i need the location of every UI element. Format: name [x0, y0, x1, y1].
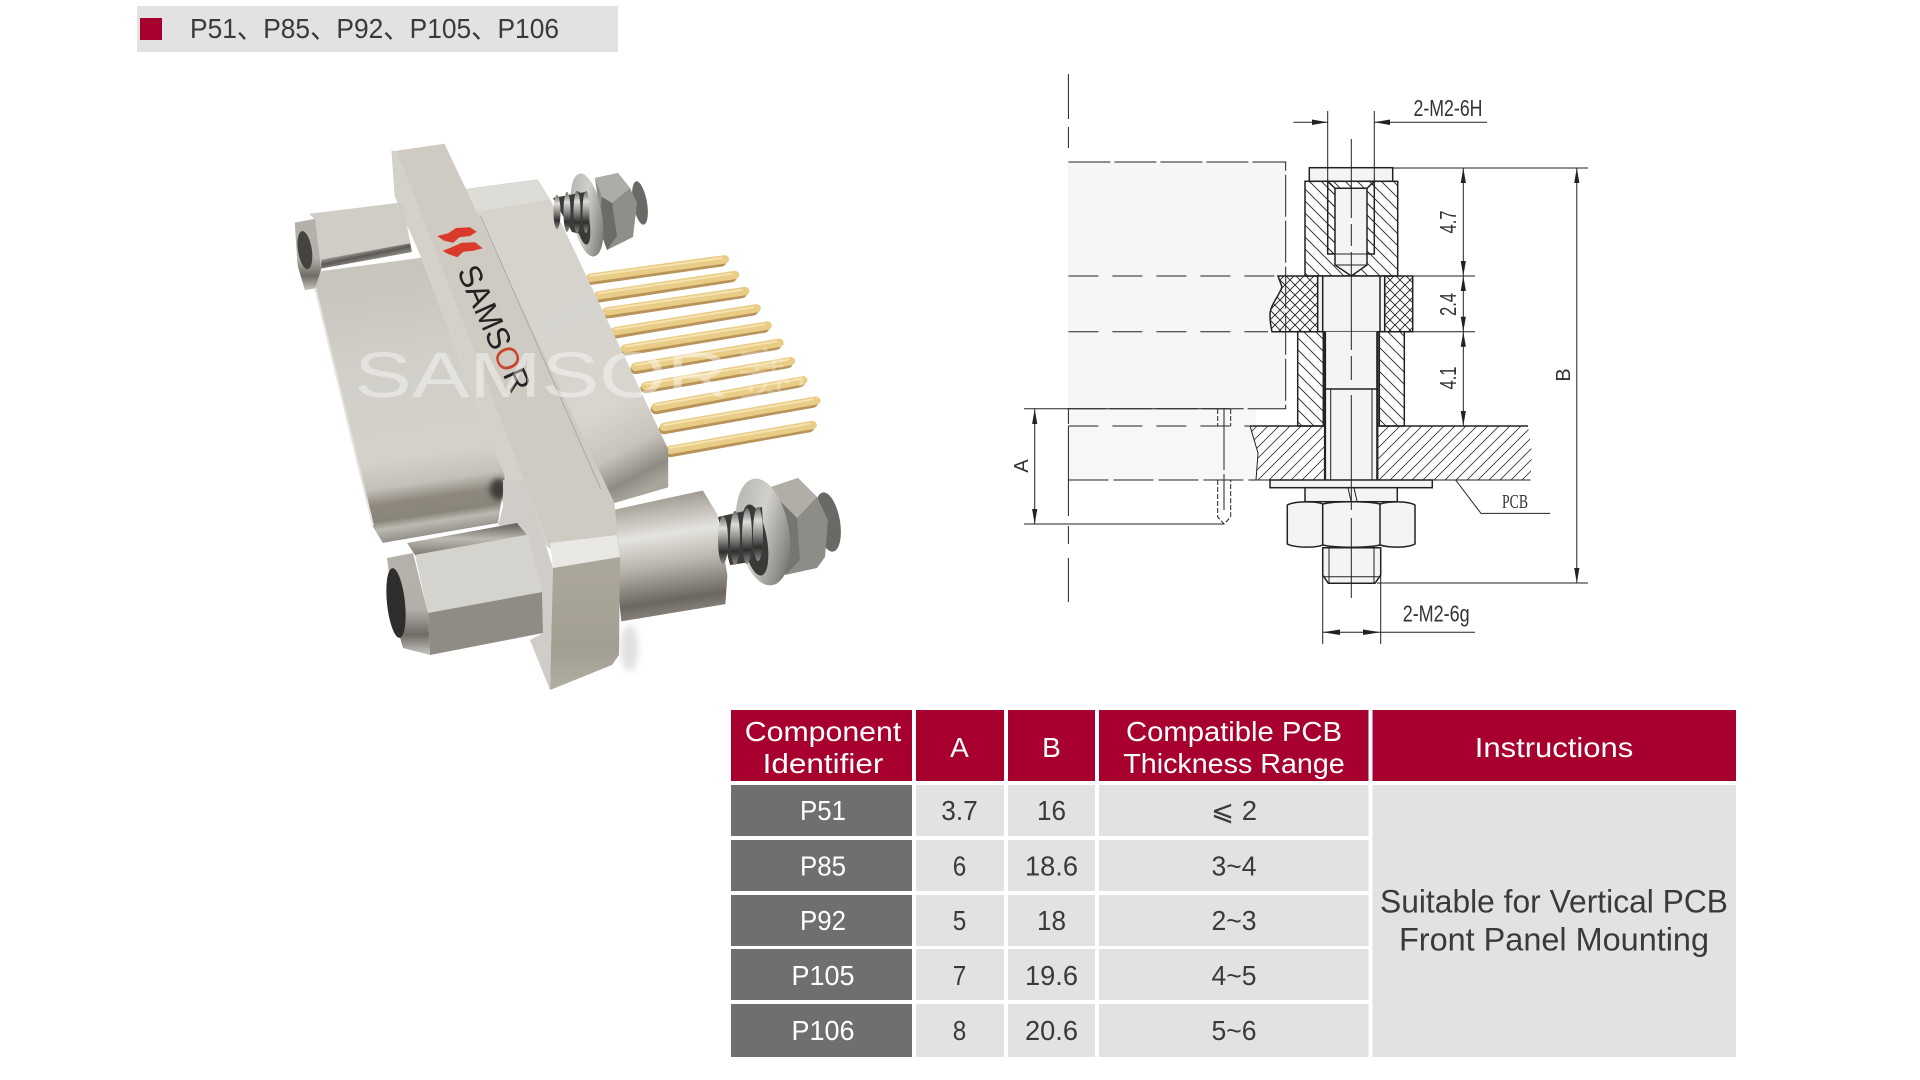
- flange front face: [397, 144, 620, 556]
- dimension 2-M2-6g: 2-M2-6g: [1403, 601, 1470, 627]
- row P92: 2~3: [1212, 905, 1256, 936]
- row P92: 5: [953, 905, 966, 936]
- bottom right standoff cylinder: [611, 490, 727, 621]
- PCB leader: PCB: [1502, 491, 1528, 513]
- dimension B: B: [1553, 368, 1575, 382]
- row P85: 6: [953, 850, 966, 882]
- table header: Component: [745, 716, 901, 747]
- row P85: 18.6: [1025, 850, 1078, 882]
- row P85: [731, 840, 1368, 891]
- model list bar: [137, 6, 618, 52]
- label 4.7: 4.7: [1435, 210, 1461, 234]
- row P106: P106: [792, 1015, 854, 1046]
- dimension 2-M2-6g: [1323, 547, 1475, 644]
- standoff section: [1305, 168, 1398, 276]
- faint watermark: SAMSOR: [354, 339, 729, 411]
- row P106: [731, 1004, 1368, 1057]
- table header: Thickness Range: [1123, 748, 1345, 779]
- instructions cell: [1372, 785, 1736, 1057]
- table header: B: [1042, 732, 1061, 763]
- table header: A: [950, 732, 969, 763]
- connector product render: [295, 144, 849, 690]
- row P51: P51: [800, 795, 846, 826]
- label 2.4: 2.4: [1435, 293, 1461, 316]
- row P92: P92: [800, 905, 846, 936]
- row P85: 3~4: [1212, 850, 1256, 882]
- brand name on flange: SAMSOR: [450, 260, 538, 397]
- connector pin: [1218, 409, 1231, 524]
- PCB leader: [1456, 480, 1550, 513]
- label 4.1: 4.1: [1435, 366, 1461, 390]
- row P105: 4~5: [1212, 960, 1256, 991]
- red square marker: [140, 18, 162, 40]
- row P106: 20.6: [1025, 1015, 1078, 1046]
- row P51: [731, 785, 1368, 836]
- bottom left standoff: [383, 523, 543, 655]
- row P51: 16: [1037, 795, 1066, 826]
- instructions cell: Suitable for Vertical PCB: [1380, 884, 1728, 920]
- table header: Instructions: [1475, 732, 1633, 763]
- rear shell: [464, 179, 668, 505]
- faint watermark: [354, 339, 849, 411]
- row P105: P105: [792, 960, 854, 991]
- dimension 2-M2-6H: [1294, 95, 1487, 181]
- panel section: [1270, 276, 1413, 332]
- axis of screw: [1350, 139, 1352, 598]
- technical drawing: [1011, 74, 1588, 644]
- dimension A: A: [1011, 459, 1033, 473]
- soft shadow: [620, 625, 638, 671]
- row P92: [731, 895, 1368, 946]
- washer, nut and bolt: [1270, 480, 1432, 583]
- top right bolt, washer and nut: [553, 171, 651, 259]
- row P51: ⩽ 2: [1211, 795, 1257, 826]
- top left standoff: [295, 202, 412, 290]
- row P85: P85: [800, 850, 846, 882]
- instructions cell: Front Panel Mounting: [1399, 922, 1709, 958]
- flange highlight band: [550, 535, 620, 568]
- row P105: 19.6: [1025, 960, 1078, 991]
- row P92: 18: [1037, 905, 1066, 936]
- dimension lines 4.7, 2.4, 4.1: [1393, 168, 1588, 426]
- table header: Compatible PCB: [1126, 716, 1342, 747]
- centre line of connector: [1067, 74, 1069, 602]
- flange lower wall: [498, 480, 553, 690]
- row P51: 3.7: [941, 795, 978, 826]
- PCB section: [1250, 426, 1532, 480]
- front shell: [313, 258, 505, 543]
- gold pins: [591, 258, 816, 452]
- flange end face: [550, 557, 620, 690]
- light grey outline of connector body: [1068, 162, 1345, 480]
- faint watermark: 赛硕: [737, 344, 849, 407]
- table header: [731, 710, 1736, 781]
- row P105: 7: [953, 960, 966, 991]
- spacer section: [1298, 332, 1404, 480]
- row P106: 8: [953, 1015, 966, 1046]
- specification table: [731, 710, 1736, 1057]
- model list text: P51、P85、P92、P105、P106: [190, 13, 559, 44]
- dimension 2-M2-6H: 2-M2-6H: [1414, 95, 1482, 121]
- table header: Identifier: [763, 748, 883, 779]
- dimension B: [1377, 168, 1588, 583]
- flange left wall: [391, 151, 555, 552]
- row P106: 5~6: [1212, 1015, 1256, 1046]
- dimension A: [1011, 409, 1230, 524]
- red logo mark: [437, 227, 483, 257]
- bottom right bolt, washer and nut: [718, 474, 845, 590]
- row P105: [731, 949, 1368, 1000]
